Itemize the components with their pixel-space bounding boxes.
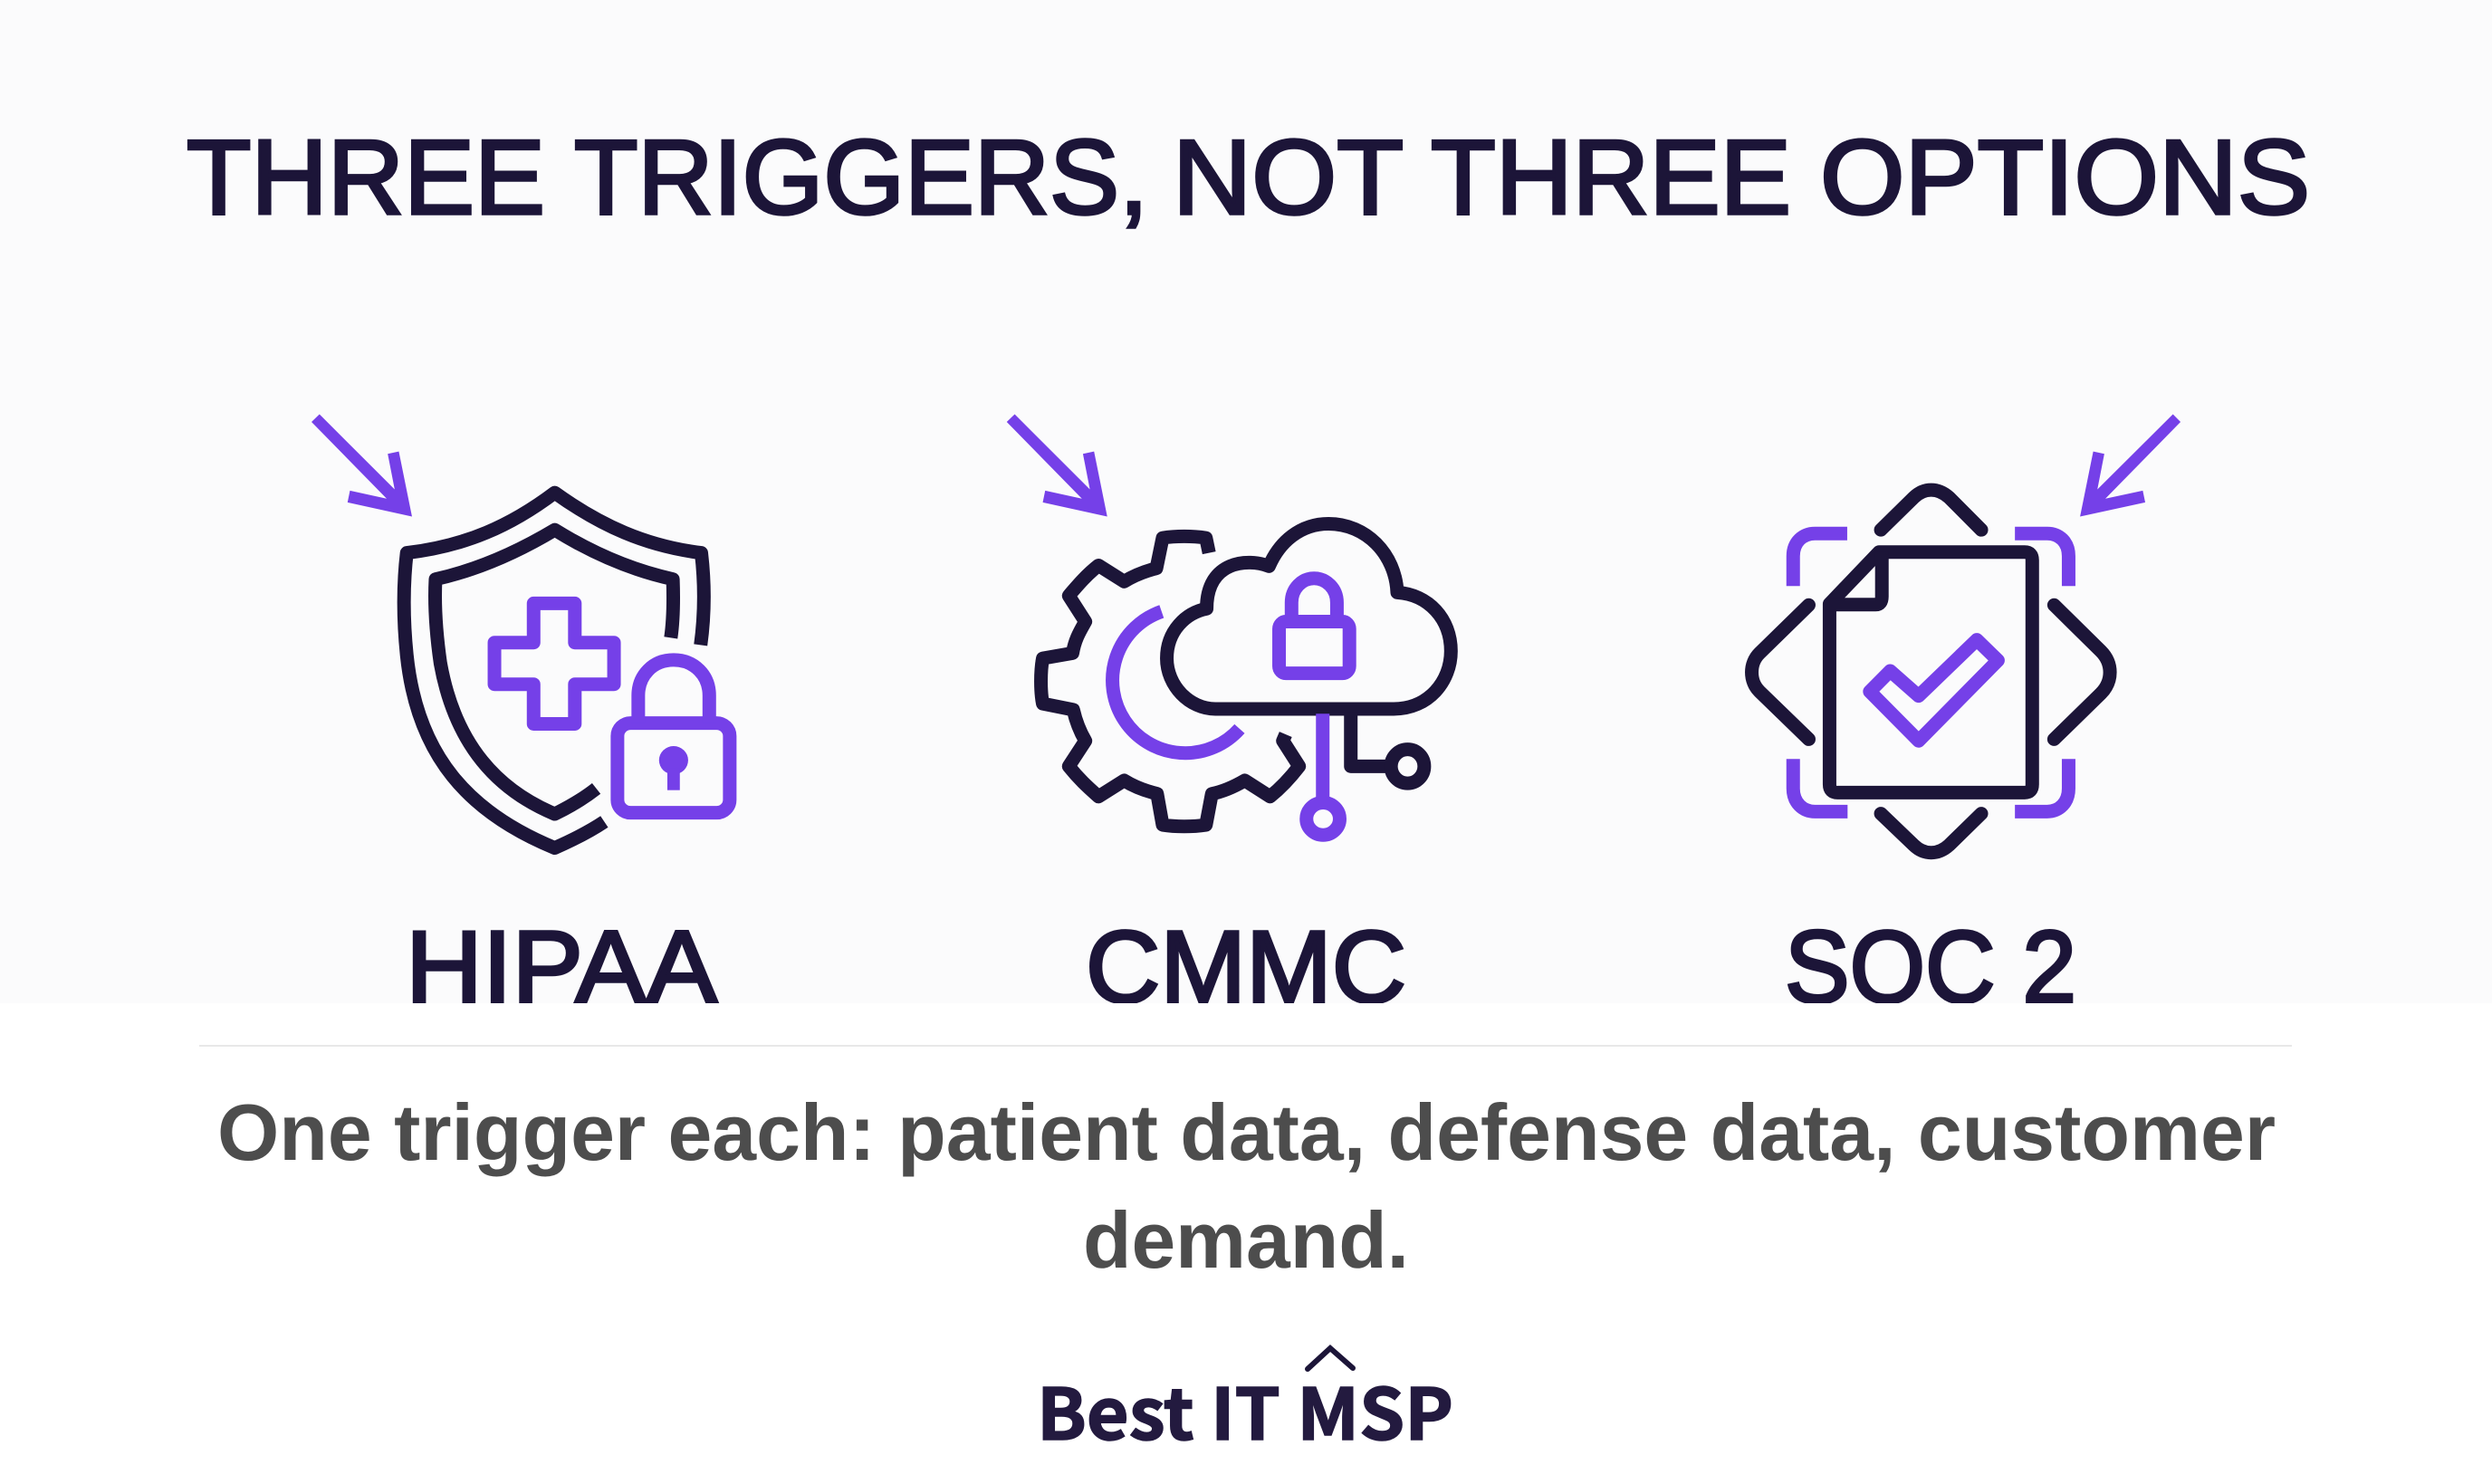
- padlock: [618, 660, 730, 813]
- logo: Best IT MSP: [1037, 1348, 1453, 1460]
- bottom panel background: [0, 1003, 2492, 1484]
- gear inner arc: [1113, 611, 1240, 753]
- title: THREE: [187, 118, 545, 236]
- medical cross: [494, 603, 614, 723]
- purple corner brackets: [1793, 533, 2068, 811]
- check mark: [1870, 640, 1998, 741]
- label: SOC 2: SOC 2: [1785, 910, 2076, 1024]
- dark circuit node: [1351, 712, 1424, 783]
- title: TRIGGERS,: [574, 118, 1148, 236]
- logo chevron: [1308, 1348, 1353, 1369]
- dark chevrons: [1752, 490, 2110, 853]
- divider: [199, 1045, 2292, 1047]
- label: CMMC: CMMC: [1086, 910, 1406, 1024]
- arrow: HIPAA: [312, 415, 412, 516]
- title: OPTIONS: [1820, 118, 2310, 236]
- purple circuit node: [1307, 713, 1339, 835]
- arrow: SOC 2: [2080, 415, 2180, 516]
- top panel background: [0, 0, 2492, 1003]
- title: [187, 118, 2310, 236]
- shield outer outline: [404, 493, 704, 848]
- cloud: [1167, 523, 1451, 709]
- shield inner outline: [436, 530, 674, 814]
- title: NOT: [1173, 118, 1404, 236]
- arrow: CMMC: [1007, 415, 1107, 516]
- logo wordmark: Best IT MSP: [1037, 1359, 1453, 1460]
- gear outline: [1041, 536, 1299, 827]
- document: [1829, 552, 2032, 792]
- icon: SOC 2 document with check: [1752, 415, 2180, 853]
- label: HIPAA: HIPAA: [406, 910, 718, 1024]
- icon: CMMC gear and cloud: [1007, 415, 1451, 835]
- title: THREE: [1431, 118, 1791, 236]
- icon: HIPAA shield with cross and lock: [312, 415, 730, 848]
- caption line 1: One trigger each: patient data, defense data, customer: [217, 1087, 2276, 1177]
- caption line 2: demand.: [1083, 1195, 1409, 1285]
- cloud padlock: [1280, 579, 1349, 674]
